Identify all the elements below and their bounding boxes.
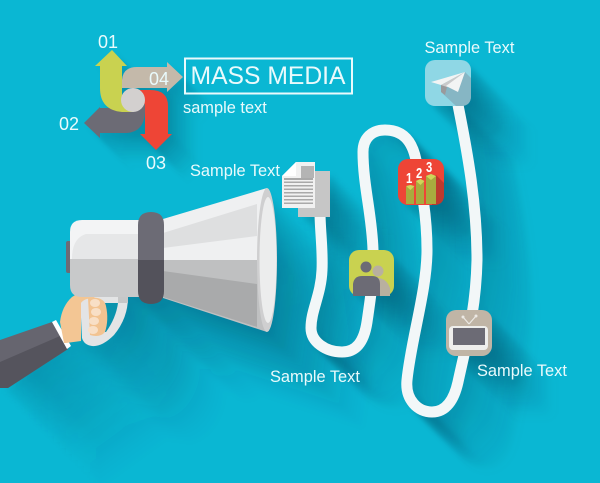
icon: ranking chart: 2	[416, 164, 422, 181]
megaphone	[66, 188, 277, 332]
body bottom	[70, 259, 139, 297]
front page	[282, 162, 315, 208]
label 01: 01	[98, 32, 118, 52]
cone bottom	[163, 260, 267, 332]
set	[449, 326, 488, 350]
icon: paper plane	[425, 60, 471, 106]
fingers	[88, 298, 107, 336]
arrow 01 yellow-green	[95, 50, 134, 112]
page fold	[282, 162, 296, 176]
icon: people	[349, 250, 394, 296]
cone top	[163, 188, 267, 260]
plane	[431, 72, 465, 85]
title: MASS MEDIA	[190, 63, 346, 90]
title box	[185, 58, 352, 94]
finger tips	[90, 299, 100, 307]
handle neck shade	[118, 297, 128, 303]
icon: television	[446, 310, 492, 356]
long shadow: arrows	[88, 54, 215, 182]
tile	[446, 310, 492, 356]
arrow 03 red	[130, 90, 172, 150]
hand holding megaphone	[0, 293, 128, 388]
cuff	[52, 320, 71, 349]
long shadow: icons	[303, 65, 556, 420]
body top	[70, 220, 139, 259]
second person	[372, 266, 384, 276]
label 03: 03	[146, 153, 166, 173]
icon: ranking chart	[398, 158, 444, 205]
label: plane: Sample Text	[424, 39, 515, 57]
tile	[425, 60, 471, 106]
icon: documents	[282, 162, 330, 217]
sleeve	[0, 322, 68, 388]
antenna	[463, 316, 476, 324]
palm	[60, 293, 95, 343]
long shadow: ribbon	[314, 108, 532, 467]
white winding ribbon	[311, 105, 477, 412]
bell opening	[260, 197, 276, 323]
label: television: Sample Text	[477, 362, 567, 380]
arrow 04 beige	[122, 62, 183, 92]
centre circle	[121, 88, 145, 112]
label 02: 02	[59, 114, 79, 134]
handle opening	[98, 303, 118, 332]
back page	[298, 171, 330, 217]
tile	[349, 250, 394, 296]
handle	[80, 297, 128, 346]
bell rim	[257, 188, 277, 332]
arrow 02 gray	[84, 104, 145, 138]
bars	[406, 174, 436, 204]
first person	[360, 262, 372, 272]
subtitle: sample text	[183, 99, 267, 117]
icon: ranking chart: 3	[426, 158, 432, 175]
long shadow: megaphone	[6, 194, 373, 483]
arrows diagram	[84, 50, 183, 150]
band	[138, 212, 164, 260]
tile	[398, 159, 444, 205]
digits: 1	[406, 169, 412, 186]
label: documents: Sample Text	[190, 162, 280, 180]
screen	[453, 328, 485, 345]
back cap	[66, 241, 72, 273]
label 04: 04	[149, 69, 169, 89]
label: people: Sample Text	[270, 368, 360, 386]
